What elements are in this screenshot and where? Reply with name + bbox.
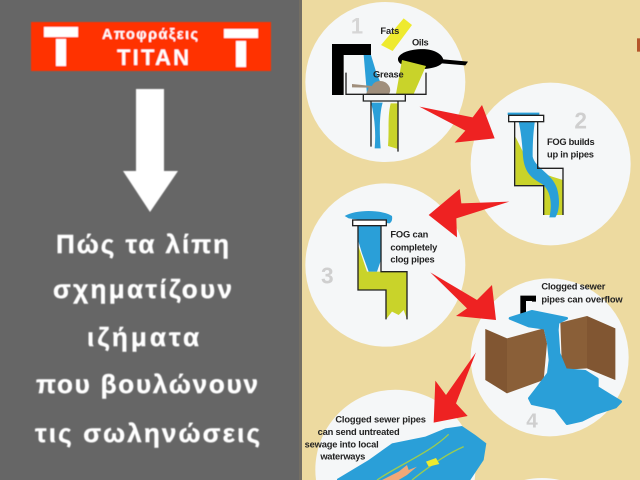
yellow debris <box>426 458 439 467</box>
drain cap <box>509 115 544 122</box>
arrow: step 2 to 3 <box>429 189 509 237</box>
logo text: company descriptor: Αποφράξεις <box>102 27 198 43</box>
title: που βουλώνουν <box>36 369 258 399</box>
icon: left T <box>44 27 78 66</box>
caption: FOG builds <box>547 137 595 147</box>
water in pipe <box>508 113 559 217</box>
left column content <box>31 22 271 448</box>
panel: left grey column <box>0 0 299 480</box>
step 5 <box>305 390 486 480</box>
arrow: step 1 to 2 <box>419 105 495 143</box>
panel: right tan background <box>302 0 640 480</box>
water stream <box>364 55 385 148</box>
icon: right T <box>224 29 258 67</box>
frying pan <box>398 49 468 69</box>
logo banner <box>31 22 271 71</box>
step 1 <box>305 2 468 162</box>
title <box>35 229 260 448</box>
title: σχηματίζουν <box>53 274 232 304</box>
salmon fish <box>382 465 417 480</box>
title: τις σωληνώσεις <box>35 418 260 448</box>
caption <box>390 230 438 265</box>
caption: can send untreated <box>318 427 400 437</box>
title: ιζήματα <box>87 322 199 352</box>
logo text: company name: TITAN <box>117 45 189 70</box>
caption <box>547 137 595 160</box>
water pool <box>345 211 392 272</box>
polluted waterway <box>337 426 486 480</box>
caption: clog pipes <box>390 255 435 265</box>
sink and pipes <box>346 73 426 152</box>
number 4: 4 <box>526 409 538 432</box>
caption: Clogged sewer <box>541 281 606 291</box>
caption: FOG can <box>390 230 429 240</box>
pipe outline <box>358 226 407 319</box>
caption: sewage into local <box>305 439 379 449</box>
caption: pipes can overflow <box>541 294 623 304</box>
drain cap <box>353 220 386 226</box>
faucet <box>332 44 371 95</box>
pipe outline <box>515 122 563 215</box>
overflow water <box>510 311 621 424</box>
caption <box>541 281 623 304</box>
column edge strip <box>299 0 302 480</box>
panel: right process illustration <box>305 2 640 480</box>
edge mark <box>637 38 640 52</box>
labels: Oils <box>412 38 429 48</box>
caption: completely <box>390 243 438 253</box>
caption: waterways <box>319 451 365 461</box>
labels: Grease <box>373 69 404 79</box>
caption <box>305 415 426 461</box>
circle 6 fragment <box>524 478 560 480</box>
caption: Clogged sewer pipes <box>335 415 426 425</box>
grease <box>352 81 390 94</box>
arrow: step 3 to 4 <box>430 272 496 320</box>
clog fat <box>358 245 407 319</box>
caption: up in pipes <box>547 150 594 160</box>
fat buildup <box>515 137 563 215</box>
title: Πώς τα λίπη <box>56 229 229 259</box>
labels <box>373 26 429 79</box>
faucet <box>520 296 536 315</box>
green shore lines <box>377 434 464 480</box>
arrow: step 4 to 5 <box>434 352 476 423</box>
number 1: 1 <box>351 13 363 38</box>
fats block <box>381 18 412 51</box>
oil stream <box>388 60 426 149</box>
cabinets <box>485 328 547 393</box>
step 4 <box>471 278 629 436</box>
number 3: 3 <box>321 262 334 288</box>
labels: Fats <box>380 26 399 36</box>
step 2 <box>471 83 631 245</box>
number 2: 2 <box>574 107 587 133</box>
arrow: down to title <box>123 89 178 212</box>
step 3 <box>305 183 465 347</box>
